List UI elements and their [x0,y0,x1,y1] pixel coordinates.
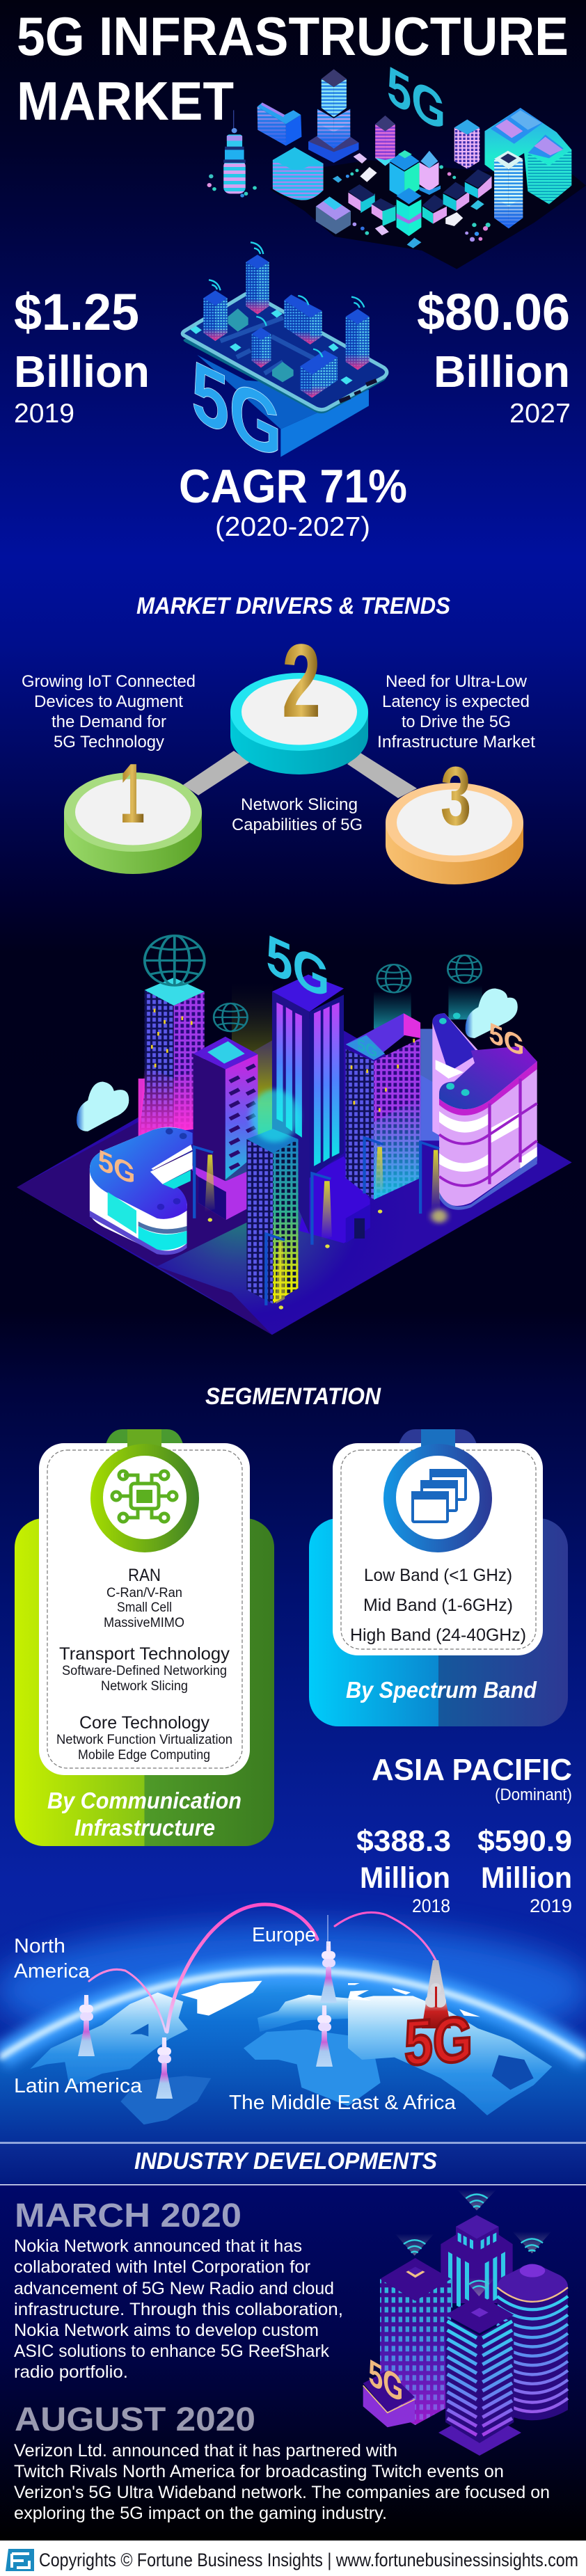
ring badge [383,1429,492,1552]
market size 2027: Billion [434,347,570,397]
development: August 2020: Verizon Ltd. announced that it has partnered with [14,2441,397,2460]
development: March 2020: infrastructure. Through this collaboration, [14,2300,343,2319]
development: March 2020: collaborated with Intel Corporation for [14,2257,310,2277]
ring badge [90,1429,199,1552]
icon: tall central tower [308,69,358,163]
panel: spectrum band [309,1429,568,1726]
dashed border [341,1450,536,1649]
tower G front [246,1090,299,1304]
text: transport technology [59,1644,230,1694]
tower A [138,978,205,1139]
icon: trees [207,165,491,241]
panel label [47,1788,241,1840]
text: core technology: Mobile Edge Computing [78,1748,210,1763]
driver text 2 [232,795,363,834]
heading band: INDUSTRY DEVELOPMENTS [134,2148,437,2175]
driver text 1 [22,672,196,752]
text: transport technology: Network Slicing [101,1679,188,1694]
phone platform [182,294,387,413]
icon: stacked windows [413,1470,466,1522]
panel label: Infrastructure [74,1815,215,1840]
globes small [214,955,482,1031]
text: transport technology: Software-Defined Networking [62,1664,227,1678]
text: RAN: C-Ran/V-Ran [106,1586,182,1600]
region labels: America [14,1960,90,1982]
back tower [441,2215,513,2308]
CAGR: CAGR 71% [179,460,407,513]
Asia Pacific stats: $590.9 [477,1824,572,1858]
icon: purple tower [375,116,395,166]
front tower [438,2295,521,2456]
ribbon tab [396,1429,480,1468]
driver text 3: to Drive the 5G [402,713,511,731]
development: March 2020: advancement of 5G New Radio and cloud [14,2279,334,2298]
Asia Pacific stats [356,1753,572,1916]
icon: low purple block [316,197,351,234]
5G big lettering: 5G [191,341,282,479]
driver text 1: 5G Technology [54,733,164,752]
ground plate [17,1015,572,1335]
region labels: Latin America [14,2075,143,2097]
wifi signals [395,2190,552,2296]
illustration: isometric smart city [207,54,586,269]
tower D: 5G [357,1034,377,1062]
Asia Pacific stats: $388.3 [356,1824,451,1858]
driver text 3: Infrastructure Market [377,733,535,752]
low 5G block [363,2351,415,2427]
driver 2 cylinder: 2 [282,623,321,740]
icon: company logo [6,2549,34,2571]
driver text 2: Capabilities of 5G [232,816,363,834]
wifi signals [209,242,364,357]
white card [333,1443,543,1655]
driver text 3 [377,672,535,752]
development: March 2020: MARCH 2020 [15,2197,241,2234]
text: RAN: MassiveMIMO [104,1616,184,1630]
CAGR [179,460,407,542]
icon: striped antenna tower [223,110,246,193]
text: bands: Mid Band (1-6GHz) [363,1596,513,1615]
Asia Pacific stats: 2019 [530,1895,572,1916]
icon: block building [258,102,301,145]
driver text 3: Need for Ultra-Low [386,672,528,691]
text: RAN: RAN [128,1566,161,1585]
text: RAN: Small Cell [117,1600,172,1615]
illustration: neon towers [363,2190,568,2456]
icon: white striped tower [494,151,523,228]
driver 1 cylinder [64,746,202,874]
low 5G block: 5G [368,2351,403,2411]
icon: big teal building [484,108,571,204]
CAGR: (2020-2027) [215,512,370,542]
market size 2027: $80.06 [417,283,570,341]
driver text 3: Latency is expected [382,692,530,711]
Asia Pacific stats: ASIA PACIFIC [372,1753,572,1787]
driver text 1: the Demand for [52,713,166,731]
driver text 1: Growing IoT Connected [22,672,196,691]
heading: segmentation: SEGMENTATION [205,1383,381,1410]
Asia Pacific stats: 2018 [412,1895,450,1916]
street lamps [194,1138,448,1310]
market size 2019: Billion [14,347,150,397]
footer [0,2541,586,2576]
region labels: Europe [252,1924,316,1946]
panel: communication infrastructure [15,1429,274,1846]
development: August 2020: AUGUST 2020 [15,2401,255,2438]
pink building rear wing [432,1013,478,1140]
development: August 2020: Verizon's 5G Ultra Wideband network. The companies are focused on [14,2483,550,2502]
left tower [380,2258,451,2425]
heading band [0,2142,586,2185]
driver text 1: Devices to Augment [34,692,183,711]
5G sign center: 5G [266,922,330,1011]
white card [39,1443,250,1775]
5G red tower [404,1960,473,2079]
development: August 2020 [14,2401,550,2523]
tower C center [272,974,370,1243]
dashed border [47,1450,242,1768]
panel label: By Communication [47,1788,241,1813]
Asia Pacific stats: Million [360,1861,450,1895]
round tower [497,2264,568,2420]
arcs linking towers [89,1905,436,2032]
illustration: neon 5G city [17,922,572,1335]
market size 2019: $1.25 [14,283,139,341]
region labels [14,1924,457,2114]
text: transport technology: Transport Technology [59,1644,230,1664]
green panel background [15,1518,274,1846]
title: MARKET [17,70,234,132]
hero icon: 5G phone platform city [182,242,387,479]
5G sign: 5G [387,54,445,144]
development: August 2020: Twitch Rivals North America for broadcasting Twitch events on [14,2462,504,2481]
development: March 2020: radio portfolio. [14,2362,128,2382]
development: August 2020: exploring the 5G impact on the gaming industry. [14,2504,387,2523]
glow columns [232,983,273,1144]
blue panel background [309,1518,568,1726]
text: bands: Low Band (<1 GHz) [364,1566,512,1585]
text: core technology: Core Technology [79,1713,209,1733]
region labels: The Middle East & Africa [229,2092,457,2114]
text: bands [350,1566,526,1645]
towers [78,1915,337,2099]
development: March 2020: ASIC solutions to enhance 5G ReefShark [14,2342,329,2361]
driver text 2: Network Slicing [241,795,358,814]
5G red tower: 5G [404,2003,473,2079]
text: core technology [56,1713,232,1763]
connector right [347,753,417,798]
building F low left: 5G [98,1143,135,1192]
development: March 2020 [14,2197,343,2382]
title [17,6,569,132]
driver 2 cylinder [230,623,368,774]
text: bands: High Band (24-40GHz) [350,1625,526,1645]
globe map [0,1924,586,2142]
development: March 2020: Nokia Network announced that it has [14,2236,302,2256]
region labels: North [14,1935,65,1957]
tower B [185,1037,258,1220]
cloud right [466,989,518,1038]
icon: circuit chip [112,1471,177,1522]
icon: window tower [454,120,480,169]
text: core technology: Network Function Virtualization [56,1733,232,1747]
ribbon tab [103,1429,186,1468]
icon: city block cluster [333,150,491,248]
heading: market drivers: MARKET DRIVERS & TRENDS [136,593,450,619]
driver 1 cylinder: 1 [120,746,145,841]
market size 2027 [417,283,571,429]
driver 3 cylinder [386,749,523,884]
industry developments background [0,2185,586,2541]
5G sign right: 5G [489,1016,524,1063]
panel label: By Spectrum Band [346,1677,537,1703]
tower D [346,1013,420,1200]
Asia Pacific stats: (Dominant) [495,1786,572,1804]
market size 2019: 2019 [14,399,74,429]
pink building [439,1012,537,1210]
building F low left [90,1127,193,1255]
cloud left [77,1081,129,1131]
Asia Pacific stats: Million [481,1861,572,1895]
development: March 2020: Nokia Network aims to develop custom [14,2321,319,2340]
market size 2027: 2027 [509,399,571,429]
connector left [183,751,250,795]
globe large [145,936,205,985]
towers on platform [190,255,370,398]
icon: round striped building [273,148,324,200]
driver 3 cylinder: 3 [441,749,471,843]
market size 2019 [14,283,150,429]
block under phone [280,390,369,457]
text: RAN [104,1566,184,1630]
